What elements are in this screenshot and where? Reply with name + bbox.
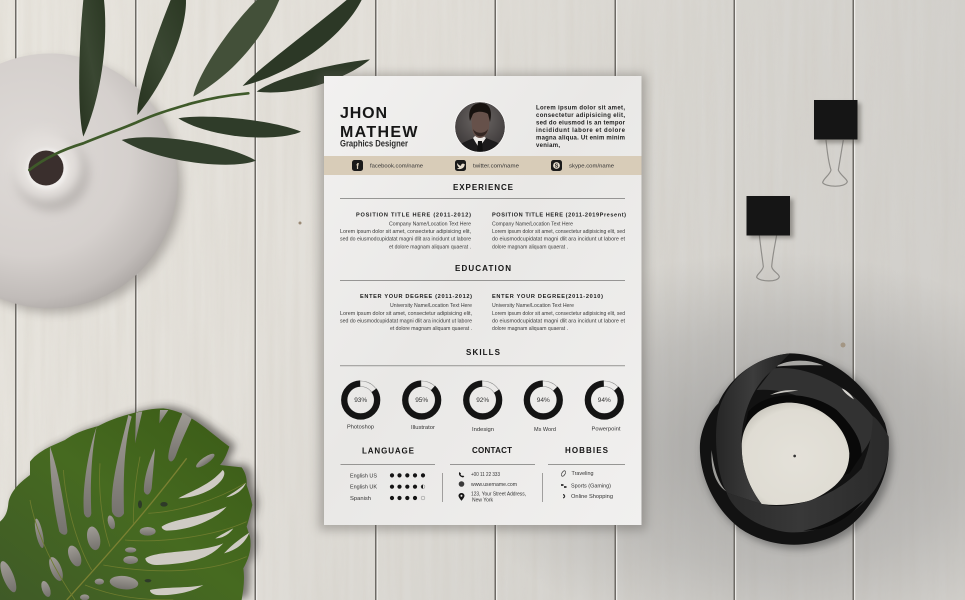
- icon: location pin: [458, 493, 464, 501]
- education entry right: do eiusmodcupidatat magni dlit ara incidunt ut labore et: [492, 318, 626, 324]
- icon: facebook: f: [356, 161, 359, 171]
- education entry left: [340, 294, 472, 332]
- education entry left: University Name/Location Text Here: [390, 303, 472, 309]
- facebook handle: facebook.com/name: [370, 164, 423, 170]
- language section: Spanish: [350, 496, 371, 502]
- contact section: CONTACT: [472, 446, 512, 455]
- skill donut: photoshop: Photoshop: [347, 424, 374, 430]
- icon: skype: [551, 160, 562, 171]
- skill donut: ms word: Ms Word: [534, 427, 556, 433]
- hobbies section: HOBBIES: [565, 446, 609, 455]
- plant branch with leaves: [29, 0, 370, 170]
- icon: skype: S: [555, 164, 559, 170]
- experience entry left: et dolore magnam aliquam quaerat .: [389, 244, 471, 250]
- skill donut: powerpoint: 94%: [598, 397, 611, 404]
- skill donut: powerpoint: [585, 381, 623, 433]
- hobby: sports: Sports (Gaming): [571, 484, 611, 490]
- education entry left: sed do eiusmodcupidatat magni dlit ara incidunt ut labore: [340, 318, 472, 324]
- skill donut: ms word: 94%: [537, 397, 550, 404]
- website: www.username.com: [471, 482, 517, 488]
- address: 123, Your Street Address,: [471, 491, 526, 497]
- language section: English US: [350, 473, 377, 479]
- icon: facebook: [352, 160, 363, 171]
- skill donut: illustrator: [403, 381, 441, 431]
- contact section: [450, 446, 535, 503]
- icon: sports: [561, 484, 566, 488]
- address: [471, 491, 526, 503]
- skill donut: illustrator: 95%: [415, 397, 428, 404]
- intro paragraph: sed do eiusmod is an tempor: [536, 120, 626, 126]
- intro paragraph: Lorem ipsum dolor sit amet,: [536, 106, 625, 112]
- experience entry right: POSITION TITLE HERE (2011-2019Present): [492, 212, 626, 218]
- resume paper: [319, 74, 646, 530]
- education entry left: Lorem ipsum dolor sit amet, consectetur adipisicing elit,: [340, 311, 472, 317]
- skill donut: illustrator: Illustrator: [411, 425, 435, 431]
- language section: English UK: [350, 485, 377, 491]
- phone number: +00 11 22 333: [471, 472, 500, 478]
- name heading: JHON: [340, 105, 387, 122]
- icon: globe: [459, 481, 464, 487]
- skill donut: indesign: [464, 381, 502, 433]
- skill donut: indesign: Indesign: [472, 427, 494, 433]
- experience entry left: POSITION TITLE HERE (2011-2012): [356, 212, 471, 218]
- monstera leaf: [0, 406, 258, 600]
- intro paragraph: veniam,: [536, 143, 560, 149]
- experience entry right: Lorem ipsum dolor sit amet, consectetur adipisicing elit, sed: [492, 229, 625, 235]
- skill donut: ms word: [524, 381, 562, 433]
- experience entry right: do eiusmodcupidatat magni dlit ara incidunt ut labore et: [492, 237, 626, 243]
- address: New York: [472, 497, 493, 503]
- skill donut: photoshop: [342, 381, 380, 430]
- experience entry right: dolore magnam aliquam quaerat .: [492, 244, 568, 250]
- icon: twitter: [455, 160, 466, 171]
- experience entry left: Company Name/Location Text Here: [389, 221, 471, 227]
- education entry right: University Name/Location Text Here: [492, 303, 574, 309]
- experience heading: EXPERIENCE: [453, 183, 514, 192]
- hobby: traveling: Traveling: [572, 471, 594, 477]
- skill donut: photoshop: 93%: [354, 397, 367, 404]
- name heading: MATHEW: [340, 124, 418, 141]
- profile photo: [455, 102, 506, 156]
- language section: LANGUAGE: [362, 446, 415, 456]
- vase: [0, 54, 182, 313]
- intro paragraph: magna aliqua. Ut enim minim: [536, 136, 625, 142]
- education entry right: Lorem ipsum dolor sit amet, consectetur adipisicing elit, sed: [492, 311, 625, 317]
- intro paragraph: [536, 106, 626, 149]
- icon: travel: [561, 470, 566, 477]
- experience entry right: [492, 212, 626, 250]
- binder clips: [746, 100, 861, 281]
- experience entry left: Lorem ipsum dolor sit amet, consectetur adipisicing elit,: [340, 229, 471, 235]
- hobby: online shopping: Online Shopping: [571, 494, 613, 500]
- black ring candle: [700, 353, 892, 549]
- icon: phone: [459, 472, 464, 477]
- education heading: EDUCATION: [455, 264, 511, 273]
- skill donut: indesign: 92%: [476, 397, 489, 404]
- experience entry left: [340, 212, 471, 250]
- education entry left: ENTER YOUR DEGREE (2011-2012): [360, 294, 472, 300]
- education entry right: ENTER YOUR DEGREE(2011-2010): [492, 294, 603, 300]
- name heading: [340, 105, 418, 141]
- education entry right: [492, 294, 626, 332]
- intro paragraph: incididunt labore et dolore: [536, 128, 626, 134]
- skype handle: skype.com/name: [569, 164, 614, 170]
- icon: shopping: [563, 494, 565, 498]
- twitter handle: twitter.com/name: [473, 164, 519, 170]
- education entry right: dolore magnam aliquam quaerat .: [492, 326, 568, 332]
- hobbies section: [548, 446, 625, 500]
- social contact band: [324, 156, 642, 175]
- skill donut: powerpoint: Powerpoint: [592, 427, 621, 433]
- language section: [340, 446, 435, 502]
- skills heading: SKILLS: [466, 348, 501, 357]
- job title: Graphics Designer: [340, 138, 408, 148]
- experience entry right: Company Name/Location Text Here: [492, 221, 573, 227]
- education entry left: et dolore magnam aliquam quaerat .: [390, 326, 472, 332]
- intro paragraph: consectetur adipisicing elit,: [536, 113, 625, 119]
- experience entry left: sed do eiusmodcupidatat magni dlit ara incidunt ut labore: [340, 237, 471, 243]
